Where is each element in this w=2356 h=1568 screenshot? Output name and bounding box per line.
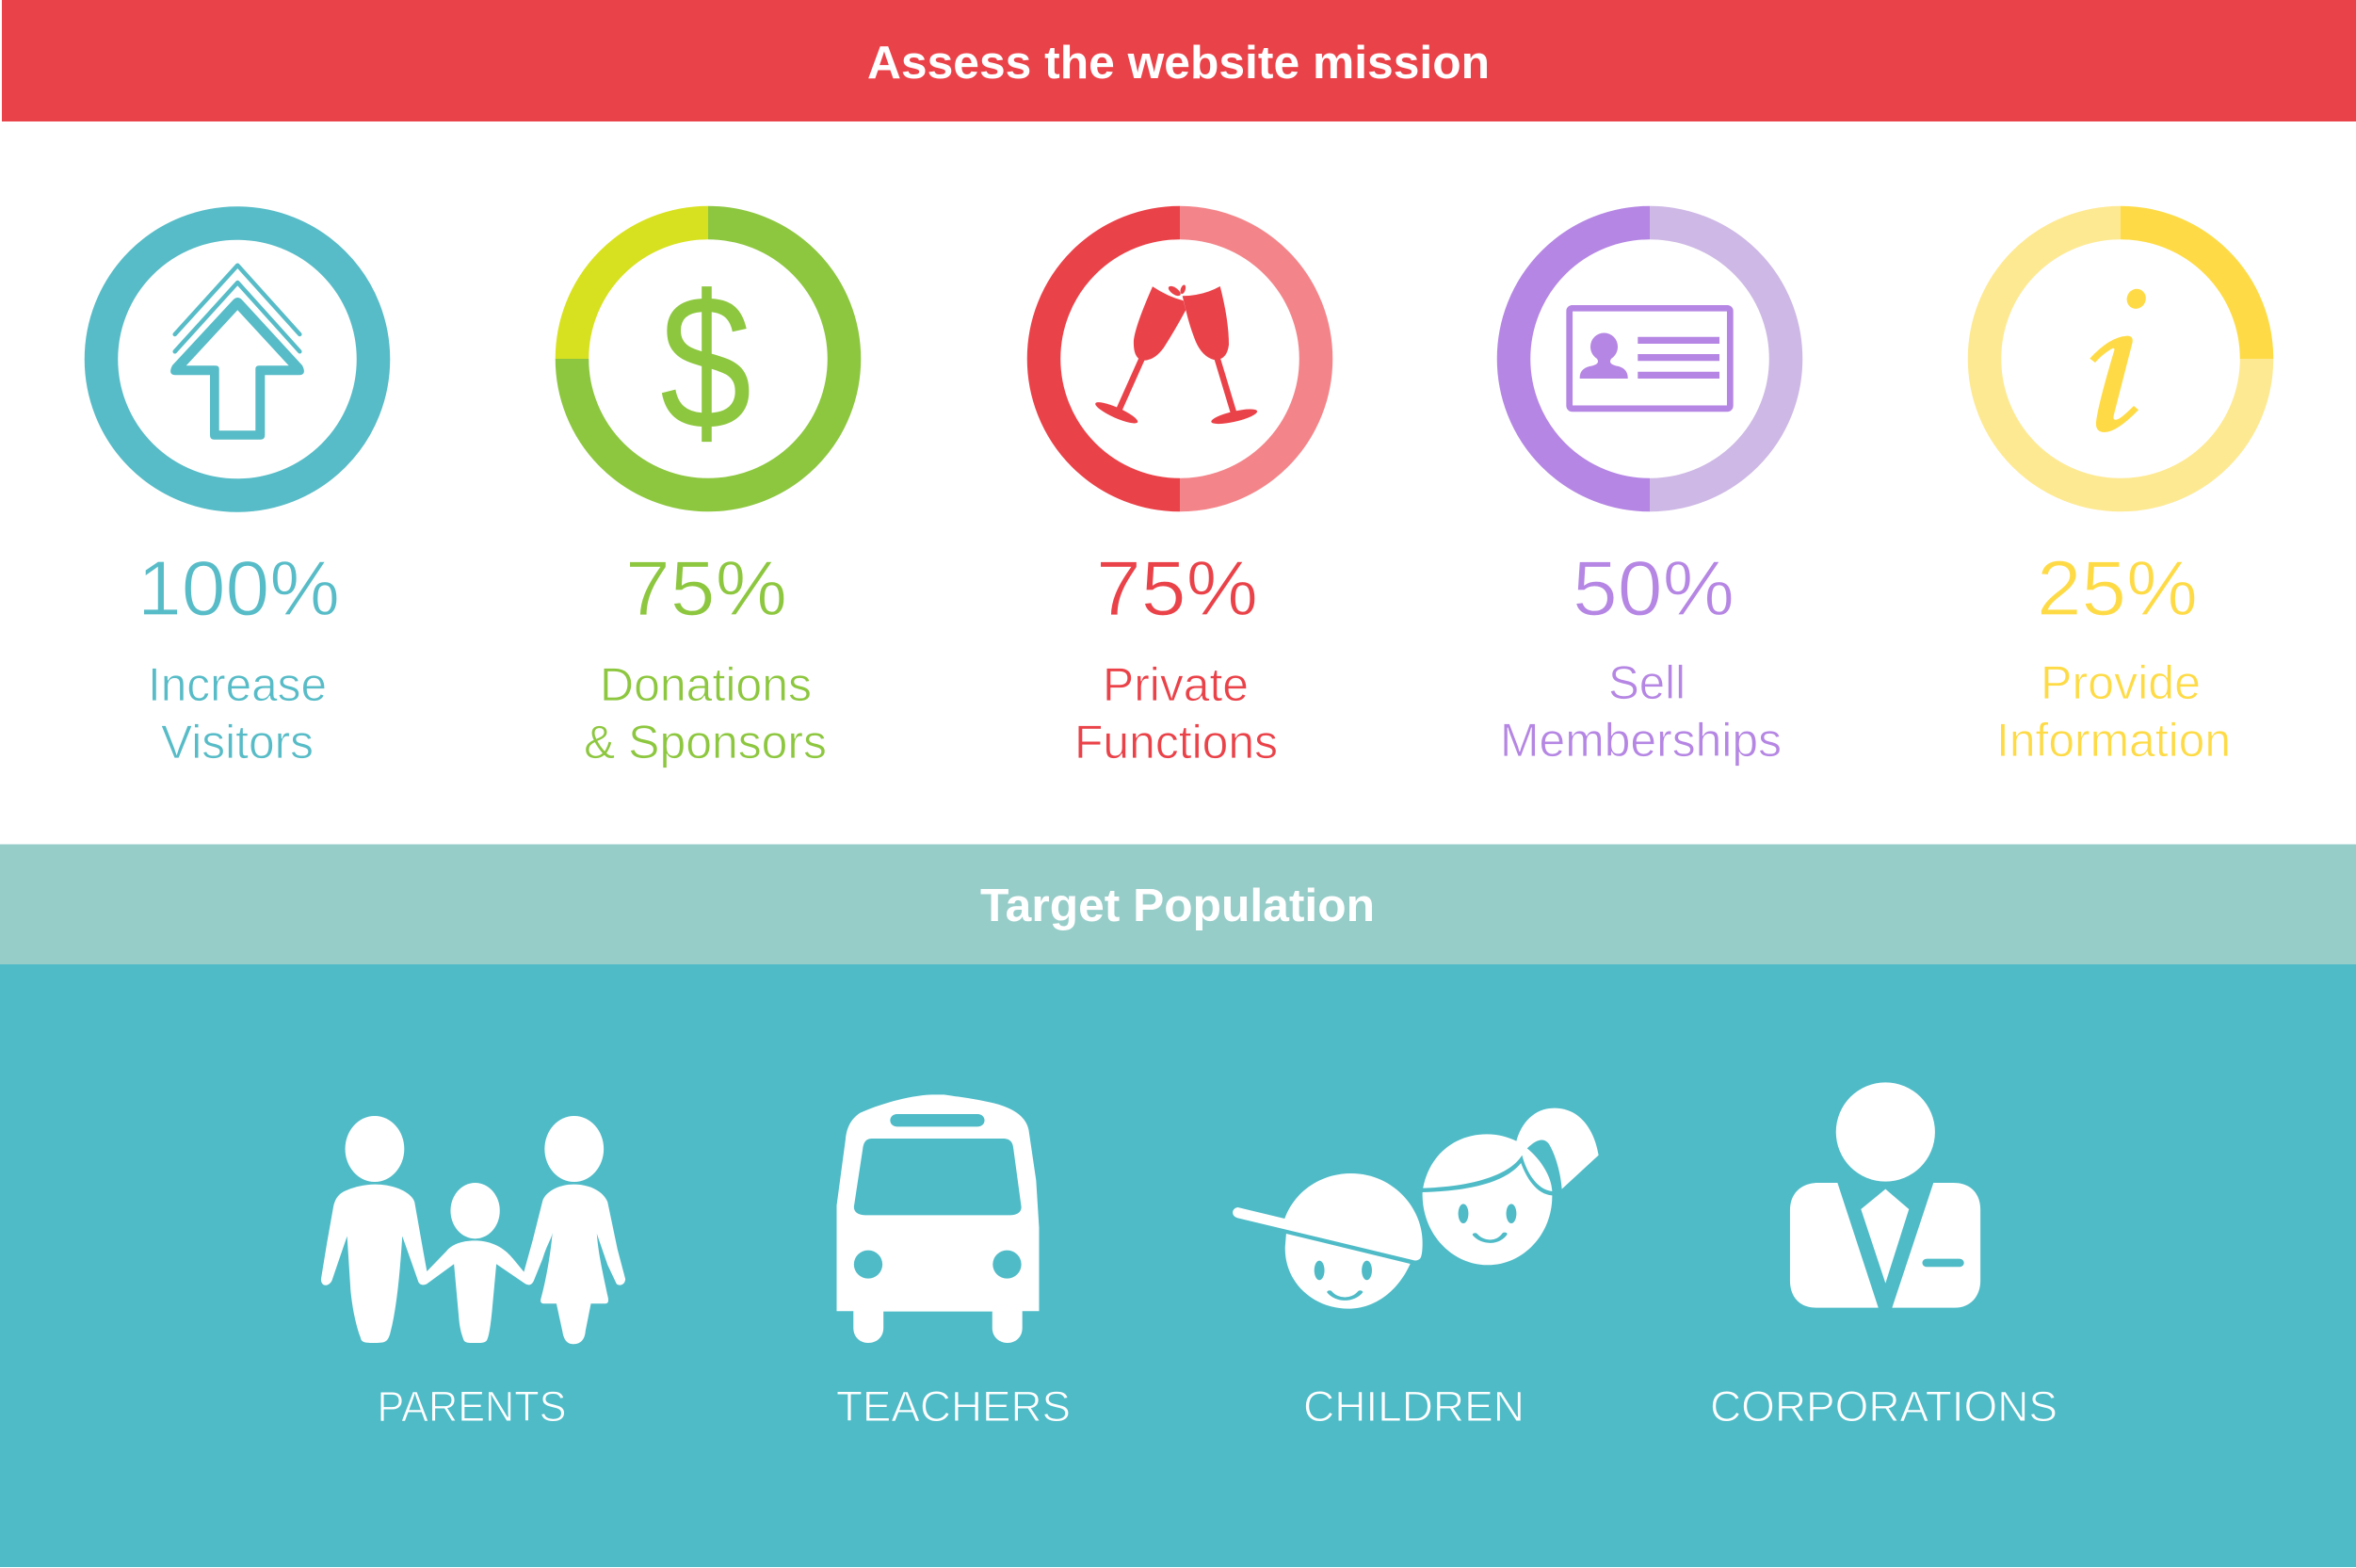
heading: Target Population xyxy=(980,881,1375,931)
icon: information i xyxy=(2090,285,2149,432)
icon: champagne glasses xyxy=(1093,284,1258,427)
percent: 25%: 25% xyxy=(2037,544,2198,632)
icon: family xyxy=(321,1116,625,1344)
percent: 75%: 75% xyxy=(625,544,787,632)
goal: sell memberships xyxy=(1500,222,1786,767)
donut: 50% xyxy=(1514,222,1786,495)
label: increase visitors: Increase xyxy=(148,658,327,711)
label: donations and sponsors xyxy=(584,658,827,768)
label: private functions: Functions xyxy=(1074,716,1278,768)
donut: 25% xyxy=(1985,222,2256,495)
goal: donations and sponsors xyxy=(573,222,845,768)
group: children xyxy=(1233,1108,1599,1431)
panel: mission goals xyxy=(102,222,2256,768)
donut: 75% xyxy=(573,222,845,495)
label: children: CHILDREN xyxy=(1303,1382,1525,1431)
icon: dollar sign: $ xyxy=(660,255,751,470)
percent: 100%: 100% xyxy=(137,544,340,632)
label: teachers: TEACHERS xyxy=(836,1382,1071,1431)
title: Assess the website mission xyxy=(867,38,1490,89)
header: target population xyxy=(0,844,2356,964)
goal: private functions xyxy=(1044,222,1316,768)
label: sell memberships: Memberships xyxy=(1500,714,1782,767)
group: teachers xyxy=(836,1094,1071,1431)
label: donations and sponsors: & Sponsors xyxy=(584,716,827,768)
icon: up arrow xyxy=(170,266,304,440)
goal: provide information xyxy=(1985,222,2256,767)
panel: audience groups xyxy=(0,964,2356,1567)
label: corporations: CORPORATIONS xyxy=(1710,1382,2057,1431)
label: sell memberships xyxy=(1500,656,1782,767)
label: private functions xyxy=(1074,658,1278,768)
percent: 75%: 75% xyxy=(1096,544,1258,632)
group: corporations xyxy=(1710,1082,2057,1431)
label: private functions: Private xyxy=(1103,658,1249,711)
label: provide information: Provide xyxy=(2041,656,2201,709)
icon: boy and girl xyxy=(1233,1108,1599,1309)
group: parents xyxy=(321,1116,625,1431)
label: sell memberships: Sell xyxy=(1608,656,1686,709)
percent: 50%: 50% xyxy=(1573,544,1735,632)
icon: business person xyxy=(1790,1082,1980,1308)
label: donations and sponsors: Donations xyxy=(600,658,812,711)
goal: increase visitors xyxy=(102,223,373,768)
header: assess the website mission xyxy=(2,0,2356,121)
icon: school bus xyxy=(837,1094,1039,1343)
donut: 75% xyxy=(1044,222,1316,495)
label: increase visitors xyxy=(148,658,327,768)
icon: membership card xyxy=(1570,308,1730,409)
label: provide information: Information xyxy=(1996,714,2231,767)
donut: 100% xyxy=(102,223,373,495)
label: parents: PARENTS xyxy=(377,1382,567,1431)
label: provide information xyxy=(1996,656,2231,767)
label: increase visitors: Visitors xyxy=(161,716,314,768)
